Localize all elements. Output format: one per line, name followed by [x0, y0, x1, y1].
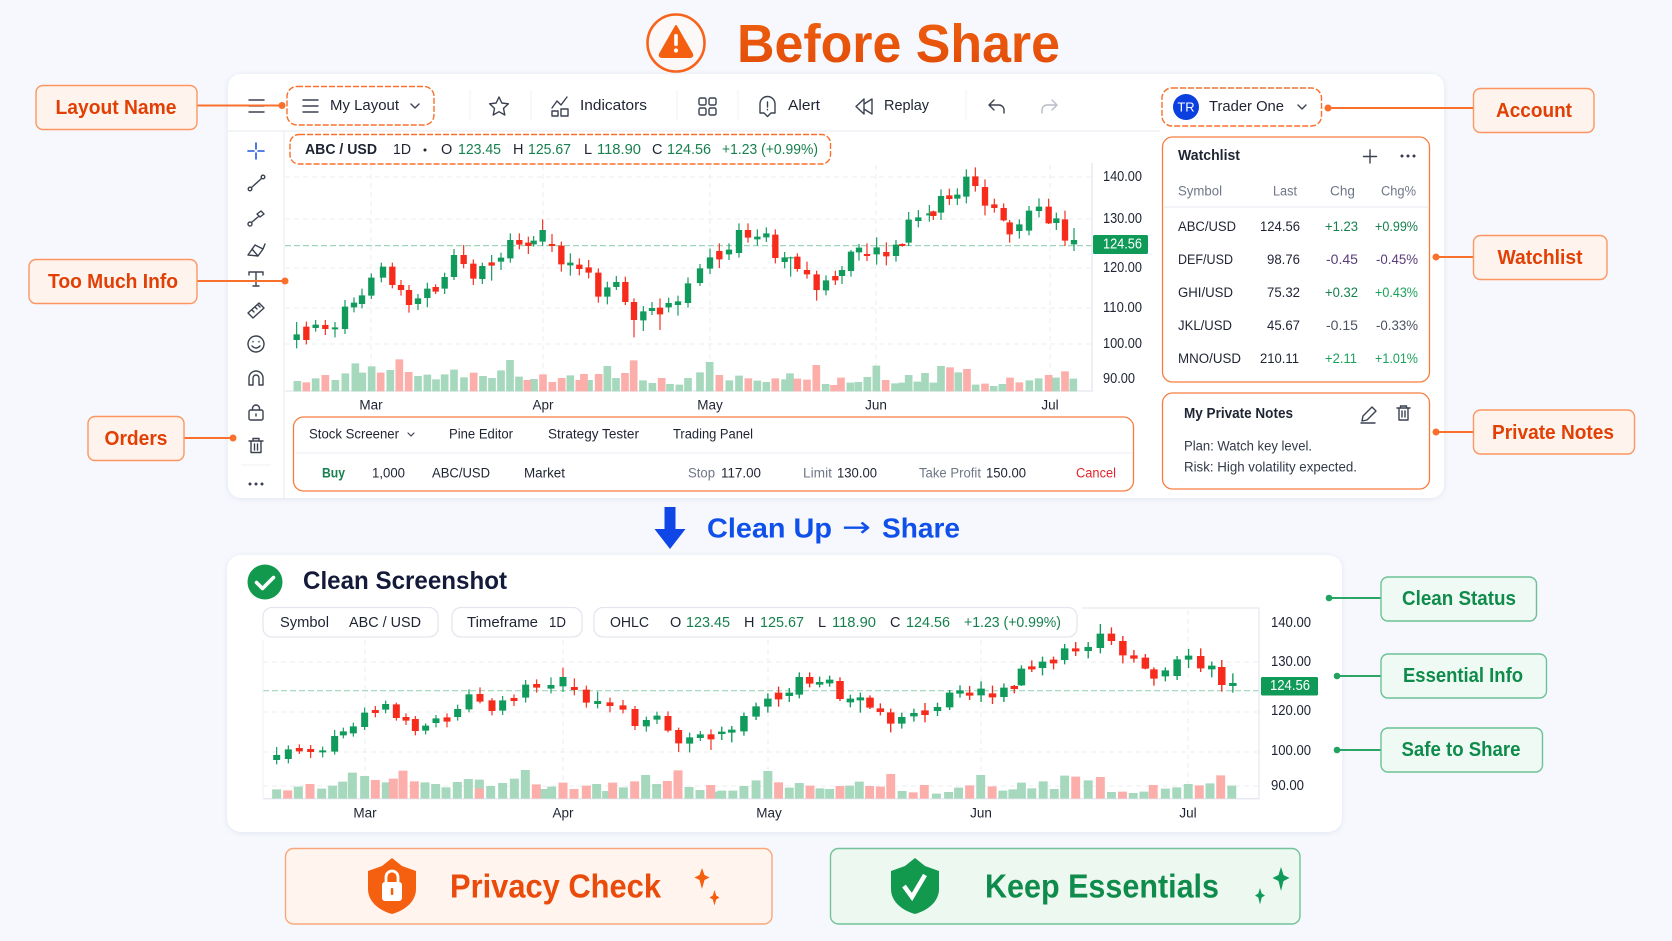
time axis: May	[697, 398, 723, 412]
orders panel highlight: 1,000	[372, 466, 405, 480]
clean price tag: 124.56	[1270, 678, 1310, 694]
callout: Account	[1324, 88, 1594, 132]
icon: undo	[989, 100, 1004, 113]
symbol OHLC bar highlight: 123.45	[458, 142, 501, 158]
watchlist panel highlight: -0.33%	[1376, 318, 1418, 333]
current price tag	[1093, 235, 1148, 254]
icon: green shield with check	[891, 858, 939, 914]
button: Privacy Check	[286, 848, 772, 924]
icon: down arrow	[654, 507, 686, 549]
orders panel highlight: Market	[524, 466, 565, 480]
icon: layout grid	[699, 98, 716, 115]
orders panel highlight: ABC/USD	[432, 466, 490, 480]
icon: orange shield with lock	[368, 858, 416, 914]
clean price axis: 140.00	[1271, 615, 1311, 631]
symbol OHLC bar highlight: L	[584, 142, 592, 158]
time axis: Mar	[359, 398, 383, 412]
text: Clean Up → Share	[707, 510, 960, 544]
watchlist panel highlight: GHI/USD	[1178, 285, 1233, 300]
heading text: Before Share	[737, 14, 1060, 74]
replay button: Replay	[884, 98, 930, 114]
orders panel highlight: Stock Screener	[309, 426, 399, 442]
watchlist panel highlight: +0.43%	[1375, 285, 1418, 300]
clean time axis: May	[756, 806, 782, 820]
clean candles	[277, 624, 1233, 764]
orders panel highlight: 130.00	[837, 466, 877, 480]
icon: more	[248, 482, 264, 486]
candles	[297, 167, 1074, 348]
watchlist panel highlight: +2.11	[1325, 351, 1357, 366]
clean volume bars	[277, 770, 1232, 799]
panel: clean screenshot	[227, 555, 1342, 832]
clean time axis: Mar	[353, 806, 377, 820]
info pill: timeframe: Timeframe	[467, 615, 538, 631]
watchlist panel highlight: MNO/USD	[1178, 351, 1241, 366]
icon: text tool	[249, 272, 263, 286]
watchlist panel highlight	[1162, 137, 1430, 382]
label: Keep Essentials: Keep Essentials	[985, 868, 1219, 904]
label: Privacy Check: Privacy Check	[450, 868, 662, 904]
callout: Private Notes: Private Notes	[1492, 422, 1614, 444]
private notes panel highlight: Risk: High volatility expected.	[1184, 460, 1357, 474]
volume bars	[297, 359, 1073, 391]
callout: Too Much Info	[29, 260, 288, 304]
icon: ruler	[248, 303, 264, 318]
private notes panel highlight: My Private Notes	[1184, 406, 1293, 422]
clean price tag	[1261, 677, 1318, 696]
symbol OHLC bar highlight: 124.56	[667, 142, 711, 158]
watchlist panel highlight: +1.23	[1325, 219, 1358, 234]
clean candlestick chart	[277, 624, 1233, 799]
icon: brush	[248, 244, 265, 256]
watchlist panel highlight: 124.56	[1260, 219, 1300, 234]
clean time axis: Apr	[552, 806, 574, 820]
info pill: symbol	[263, 608, 438, 637]
private notes panel highlight: Plan: Watch key level.	[1184, 438, 1312, 454]
symbol OHLC bar highlight: ABC / USD	[305, 142, 377, 158]
price axis: 140.00	[1103, 169, 1142, 185]
icon: crosshair	[248, 143, 264, 159]
callout: Account: Account	[1496, 100, 1572, 122]
watchlist panel highlight: 98.76	[1267, 252, 1300, 267]
watchlist panel highlight: +0.32	[1325, 285, 1358, 300]
clean price axis: 120.00	[1271, 703, 1311, 719]
text: Clean Up → Share: Clean Up	[707, 512, 832, 544]
price axis: 100.00	[1103, 336, 1142, 352]
chart frame and grid	[263, 608, 1259, 799]
alert button: Alert	[788, 98, 820, 114]
time axis: Apr	[532, 398, 554, 412]
icon: pencil	[1361, 407, 1376, 423]
icon: smile	[248, 336, 264, 352]
callout: Orders	[88, 416, 236, 460]
callout: Layout Name: Layout Name	[56, 97, 176, 119]
watchlist panel highlight: -0.45%	[1376, 252, 1418, 267]
callout: Orders: Orders	[104, 428, 168, 450]
private notes panel highlight	[1162, 393, 1430, 489]
clean price axis	[1261, 615, 1318, 794]
price axis: 130.00	[1103, 211, 1142, 227]
icon: trend line	[248, 175, 265, 191]
price axis	[1093, 169, 1148, 387]
callout: Clean Status	[1326, 577, 1536, 621]
watchlist panel highlight: 75.32	[1267, 285, 1300, 300]
icon: star	[490, 97, 508, 115]
orders panel highlight: 117.00	[721, 466, 761, 480]
info pill: OHLC: L	[818, 615, 826, 631]
heading: Clean Screenshot: Clean Screenshot	[303, 567, 508, 595]
symbol OHLC bar highlight: C	[652, 142, 662, 158]
account selector highlight: Trader One	[1209, 99, 1284, 115]
price axis: 120.00	[1103, 260, 1142, 276]
clean time axis	[353, 806, 1197, 820]
icon: green check	[248, 564, 282, 600]
orders panel highlight: Limit	[803, 466, 832, 480]
icon: green sparkles	[1255, 867, 1290, 904]
layout selector highlight: My Layout	[330, 98, 399, 114]
account selector highlight: TR	[1177, 100, 1195, 114]
orders panel highlight: Take Profit	[919, 466, 981, 480]
info pill: OHLC: OHLC	[610, 615, 649, 631]
clean price axis: 90.00	[1271, 778, 1304, 794]
icon: notes trash	[1397, 406, 1410, 420]
alert button	[760, 97, 820, 116]
info pill: OHLC	[594, 608, 1077, 637]
orders panel highlight: 150.00	[986, 466, 1026, 480]
info pill: OHLC: +1.23 (+0.99%)	[964, 615, 1061, 631]
toolbar	[249, 86, 1322, 126]
orders panel highlight	[294, 417, 1134, 491]
symbol OHLC bar highlight	[290, 134, 830, 164]
info pill: OHLC: H	[744, 615, 754, 631]
clean time axis: Jul	[1179, 806, 1197, 820]
icon: warning	[648, 14, 704, 72]
symbol OHLC bar highlight: 1D	[393, 142, 411, 158]
text: Clean Up → Share: →	[842, 510, 871, 544]
info pill: OHLC: 125.67	[760, 615, 804, 631]
orders panel highlight: Cancel	[1076, 466, 1116, 480]
callout: Watchlist: Watchlist	[1498, 247, 1583, 269]
watchlist panel highlight: +0.99%	[1375, 219, 1418, 234]
info pill: timeframe	[452, 608, 582, 637]
info pill: symbol: ABC / USD	[349, 615, 421, 631]
orders panel highlight: Trading Panel	[673, 426, 753, 442]
watchlist panel highlight: Chg	[1330, 184, 1355, 198]
clean time axis: Jun	[970, 806, 992, 820]
orders panel highlight: Stop	[688, 466, 715, 480]
callout: Safe to Share: Safe to Share	[1402, 739, 1520, 761]
candlestick chart with volume	[285, 163, 1092, 391]
watchlist panel highlight: +1.01%	[1375, 351, 1418, 366]
symbol OHLC bar highlight: H	[513, 142, 523, 158]
watchlist panel highlight: 45.67	[1267, 318, 1300, 333]
symbol OHLC bar highlight: 118.90	[597, 142, 641, 158]
button: Keep Essentials	[830, 848, 1300, 924]
symbol OHLC bar highlight: O	[441, 142, 452, 158]
orders panel highlight: Buy	[322, 466, 345, 480]
info pill: symbol: Symbol	[280, 615, 329, 631]
indicators button: Indicators	[580, 98, 647, 114]
current price tag: 124.56	[1103, 236, 1142, 252]
layout selector highlight	[287, 86, 434, 125]
panel: before share trading screen	[228, 74, 1444, 498]
watchlist panel highlight: Last	[1273, 184, 1297, 198]
watchlist panel highlight: -0.45	[1326, 252, 1358, 267]
time axis	[359, 398, 1059, 412]
info pill: OHLC: C	[890, 615, 900, 631]
orders panel highlight: Strategy Tester	[548, 426, 640, 442]
icon: lock	[249, 405, 263, 420]
callout: Layout Name	[36, 86, 286, 130]
callout: Safe to Share	[1334, 728, 1542, 772]
clean price axis: 130.00	[1271, 654, 1311, 670]
icon: redo	[1042, 100, 1057, 113]
orders panel highlight: Pine Editor	[449, 426, 513, 442]
time axis: Jun	[865, 398, 887, 412]
clean price axis: 100.00	[1271, 743, 1311, 759]
account selector highlight	[1162, 88, 1322, 126]
icon: ray tool	[248, 211, 264, 226]
watchlist panel highlight: Symbol	[1178, 184, 1222, 198]
arrow: clean up to share	[654, 507, 960, 549]
symbol OHLC bar highlight: 125.67	[528, 142, 571, 158]
info pill: OHLC: 124.56	[906, 615, 950, 631]
drawing tools sidebar	[241, 143, 271, 486]
watchlist panel highlight: DEF/USD	[1178, 252, 1233, 267]
watchlist panel highlight: -0.15	[1326, 318, 1358, 333]
icon: menu	[249, 100, 264, 112]
text: Clean Up → Share: Share	[882, 512, 960, 544]
watchlist panel highlight: ABC/USD	[1178, 219, 1236, 234]
icon: trash	[249, 438, 263, 452]
callout: Private Notes	[1432, 410, 1634, 454]
callout: Too Much Info: Too Much Info	[48, 271, 178, 293]
replay button	[856, 98, 930, 114]
title: Before Share	[648, 14, 1060, 74]
indicators button	[552, 97, 647, 116]
watchlist panel highlight: 210.11	[1260, 351, 1299, 366]
callout: Watchlist	[1432, 236, 1607, 280]
watchlist panel highlight: JKL/USD	[1178, 318, 1232, 333]
price axis: 90.00	[1103, 371, 1135, 387]
callout: Essential Info: Essential Info	[1403, 665, 1523, 687]
price axis: 110.00	[1103, 300, 1142, 316]
symbol OHLC bar highlight: +1.23 (+0.99%)	[722, 142, 818, 158]
info pill: OHLC: 118.90	[832, 615, 876, 631]
callout: Clean Status: Clean Status	[1402, 588, 1516, 610]
icon: magnet	[249, 371, 263, 385]
callout: Essential Info	[1334, 654, 1546, 698]
info pill: OHLC: 123.45	[686, 615, 730, 631]
watchlist panel highlight: Chg%	[1381, 184, 1416, 198]
icon: orange sparkles	[694, 868, 720, 906]
watchlist panel highlight: Watchlist	[1178, 148, 1240, 164]
info pill: OHLC: O	[670, 615, 681, 631]
info pill: timeframe: 1D	[549, 615, 566, 631]
time axis: Jul	[1041, 398, 1059, 412]
